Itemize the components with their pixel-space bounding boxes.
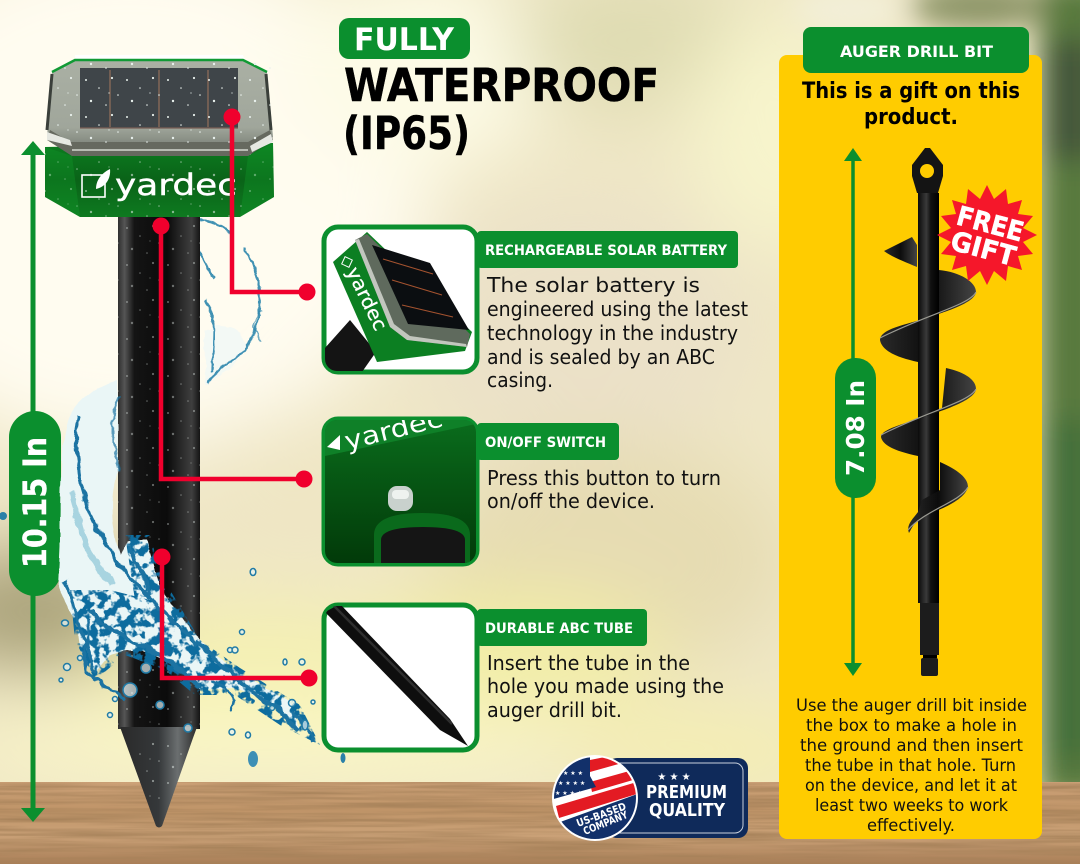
pale water sheet	[58, 380, 300, 730]
instructions text: on the device, and let it at	[805, 776, 1017, 796]
description	[487, 651, 724, 722]
flag seal: COMPANY	[582, 809, 630, 838]
mottled blue water texture	[70, 535, 320, 745]
badge: fully	[339, 18, 470, 59]
flag seal: US-BASED	[575, 801, 628, 830]
starburst: free gift	[937, 185, 1037, 285]
instructions text: Use the auger drill bit inside	[796, 696, 1027, 716]
tube	[118, 217, 200, 828]
description: Insert the tube in the	[487, 651, 690, 675]
blue streaks	[64, 395, 313, 742]
gift statement: This is a gift on this	[802, 79, 1020, 104]
label tab	[477, 609, 647, 646]
label tab: ON/OFF SWITCH	[485, 435, 606, 451]
panel: on/off switch	[324, 403, 721, 564]
description: on/off the device.	[487, 489, 655, 513]
label tab	[477, 231, 738, 268]
image card: tube spike	[324, 604, 477, 750]
starburst: free gift: FREE	[953, 201, 1027, 248]
instructions text: the box to make a hole in	[806, 716, 1017, 736]
description: casing.	[487, 368, 553, 392]
image card: switch closeup	[324, 403, 477, 564]
image card: switch closeup: yardec	[341, 403, 445, 456]
gift statement	[802, 79, 1020, 130]
green body	[45, 143, 274, 217]
description: The solar battery is	[486, 273, 700, 297]
measurement arrow: 7.08 In	[835, 148, 876, 676]
yardec logo: yardec	[115, 168, 237, 202]
auger drill bit	[880, 148, 976, 676]
yardec logo	[82, 168, 237, 202]
gift statement: product.	[864, 105, 958, 130]
description: technology in the industry	[487, 321, 738, 345]
callout line: on/off switch	[152, 218, 312, 488]
wood table	[0, 782, 1080, 864]
title text: WATERPROOF	[344, 59, 659, 112]
panel: durable abc tube	[324, 604, 724, 750]
water splash in front of tube	[0, 380, 346, 767]
description: Press this button to turn	[487, 466, 721, 490]
tab heading	[803, 27, 1029, 73]
premium quality text: PREMIUM	[646, 782, 727, 803]
title subline: (IP65)	[343, 107, 470, 160]
badge: us-based premium quality	[550, 750, 748, 841]
flag seal: ★ ★ ★ ★	[555, 790, 582, 797]
flag seal: ★ ★ ★	[563, 770, 583, 777]
instructions text: the tube in that hole. Turn	[805, 756, 1016, 776]
image card: solar top	[324, 227, 477, 372]
instructions text: the ground and then insert	[800, 736, 1023, 756]
description	[486, 273, 748, 392]
water splash behind tube	[178, 220, 262, 384]
badge: fully: FULLY	[354, 22, 455, 58]
panel: auger drill bit	[779, 27, 1042, 839]
instructions text: effectively.	[867, 816, 955, 836]
large droplet	[248, 751, 258, 767]
panel: rechargeable solar battery	[324, 227, 748, 392]
solar glass top	[47, 55, 273, 156]
callout line: tube	[154, 548, 318, 686]
image card: solar top: yardec	[342, 264, 391, 334]
label tab: RECHARGEABLE SOLAR BATTERY	[485, 243, 727, 259]
description: and is sealed by an ABC	[487, 345, 715, 369]
stray drops	[0, 512, 346, 763]
stars: ★ ★ ★	[657, 772, 691, 783]
product: solar repeller stake	[45, 55, 274, 828]
premium quality text	[646, 782, 727, 821]
flag seal: ★ ★ ★ ★	[558, 780, 585, 787]
callout line: solar battery	[224, 108, 316, 300]
heading	[339, 18, 659, 160]
description: hole you made using the	[487, 674, 724, 698]
measurement arrow: 10.15 In: 10.15 In	[16, 437, 54, 568]
description: engineered using the latest	[487, 297, 748, 321]
description	[487, 466, 721, 513]
droplets	[59, 568, 315, 738]
description: auger drill bit.	[487, 698, 622, 722]
label tab: DURABLE ABC TUBE	[485, 621, 633, 637]
measurement arrow: 10.15 In	[9, 141, 61, 822]
flag seal	[550, 750, 640, 841]
measurement arrow: 7.08 In: 7.08 In	[841, 380, 870, 476]
tab heading: AUGER DRILL BIT	[840, 42, 993, 61]
premium quality text: QUALITY	[649, 800, 726, 821]
starburst: free gift: GIFT	[947, 226, 1019, 273]
instructions text: least two weeks to work	[815, 796, 1008, 816]
instructions text	[796, 696, 1027, 836]
label tab	[477, 423, 619, 460]
